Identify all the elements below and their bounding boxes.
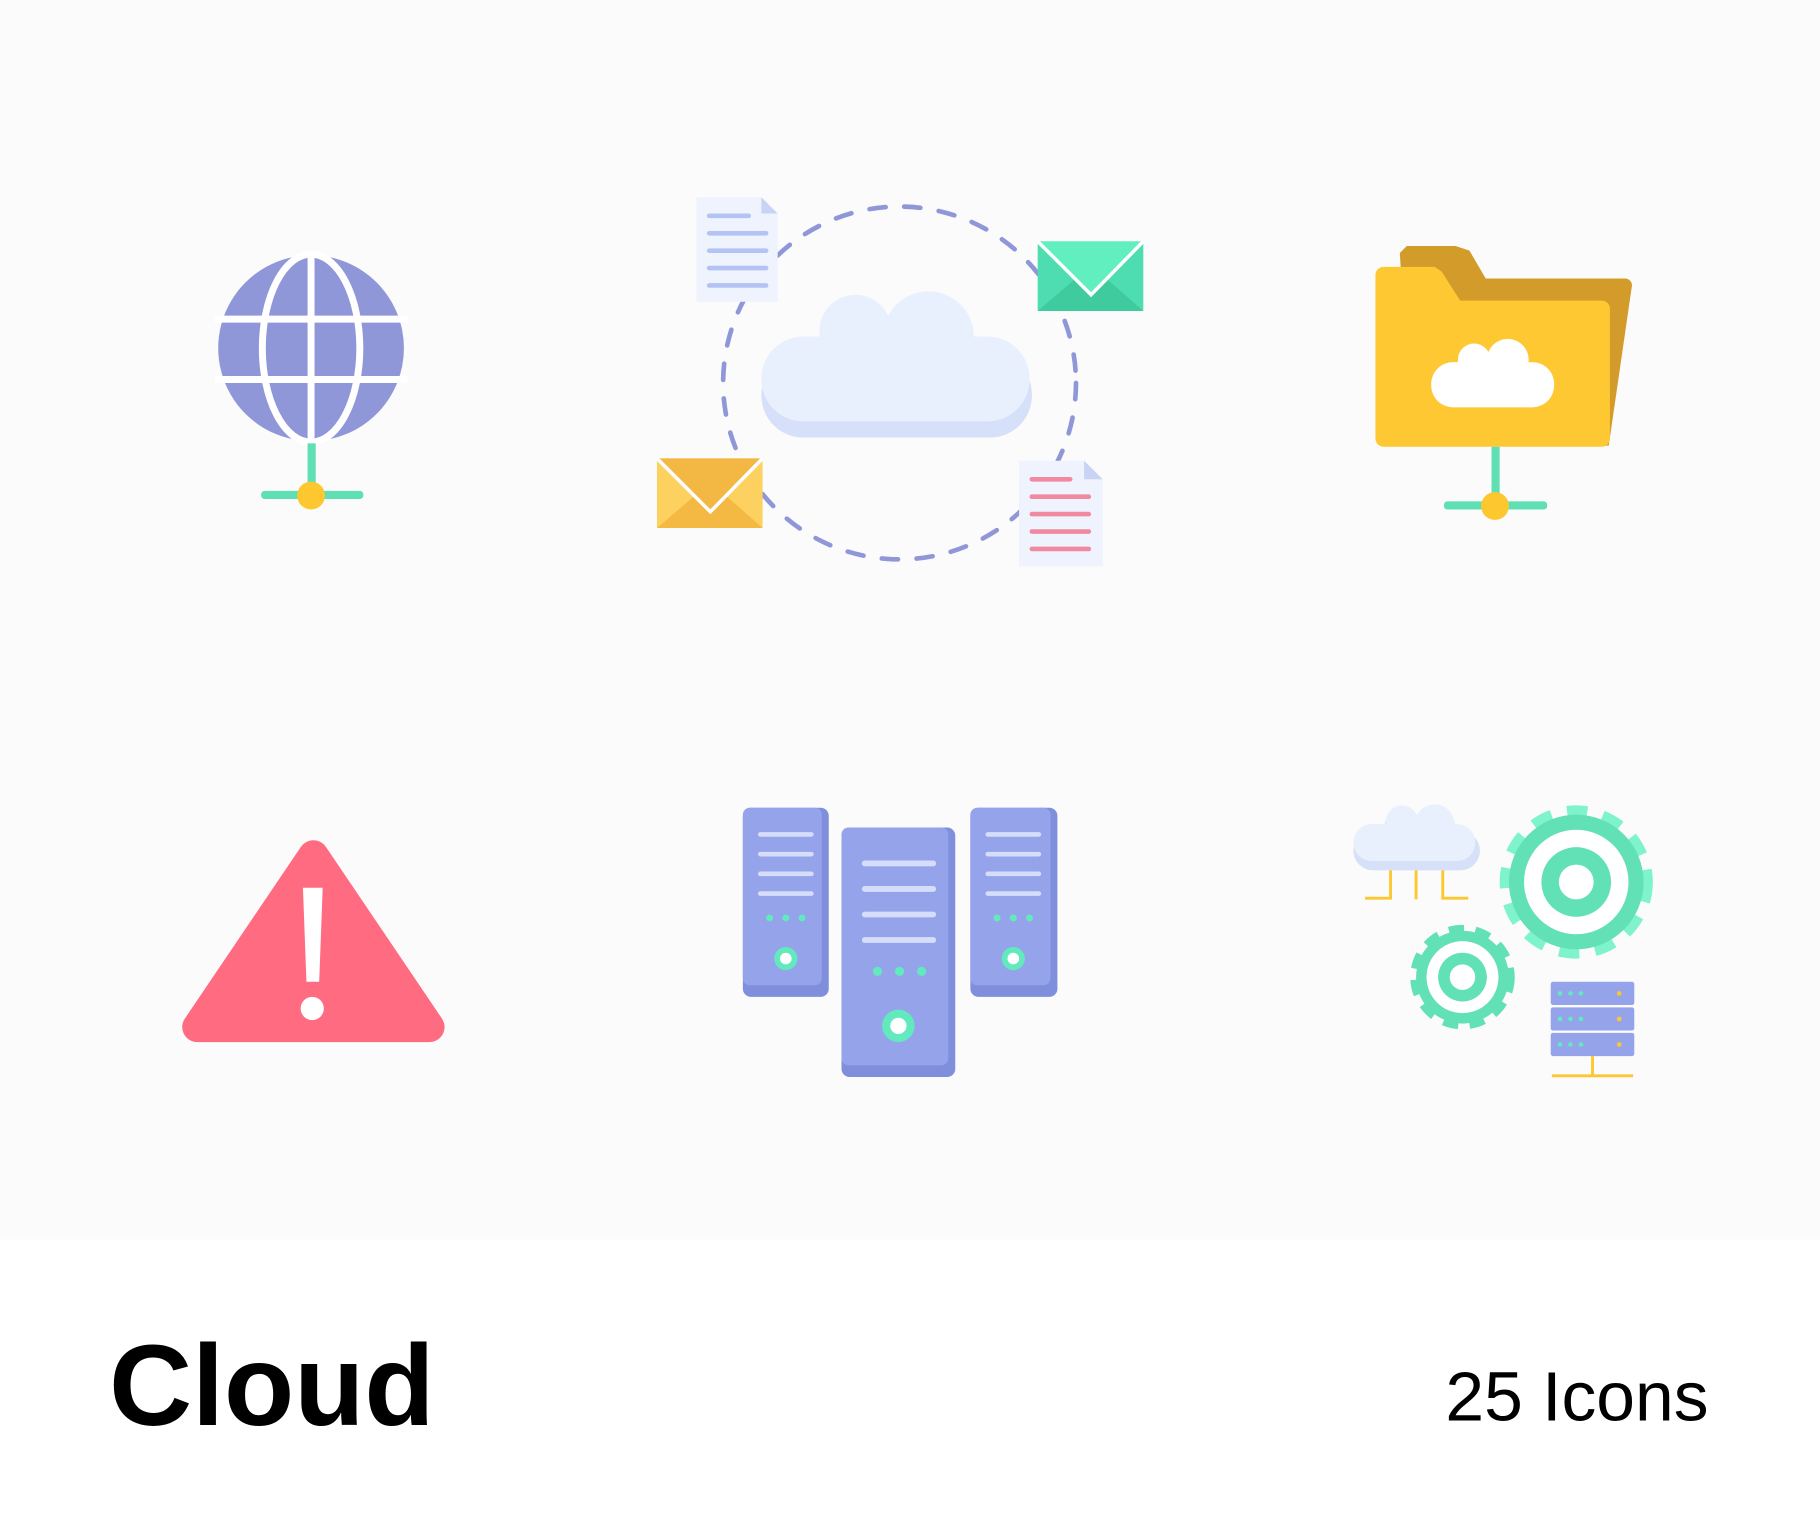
icon: server rack	[743, 808, 1057, 1077]
title: Cloud	[109, 1322, 435, 1450]
icon: network globe	[215, 253, 407, 509]
icon count: 25 Icons	[1445, 1357, 1709, 1435]
right server	[970, 808, 1057, 997]
cloud	[761, 291, 1032, 438]
small cloud	[1353, 804, 1480, 899]
envelope yellow	[657, 458, 763, 528]
small server stack	[1551, 982, 1634, 1076]
small gear	[1416, 931, 1509, 1024]
envelope green	[1038, 241, 1143, 311]
document top-left	[696, 197, 778, 302]
center server	[842, 827, 955, 1077]
icon: cloud folder	[1375, 246, 1632, 520]
left server	[743, 808, 829, 997]
icon: cloud data exchange	[657, 197, 1143, 566]
big gear	[1509, 815, 1644, 949]
icon: cloud settings	[1353, 804, 1644, 1076]
document bottom-right	[1019, 461, 1103, 566]
icon: warning triangle	[197, 855, 429, 1027]
